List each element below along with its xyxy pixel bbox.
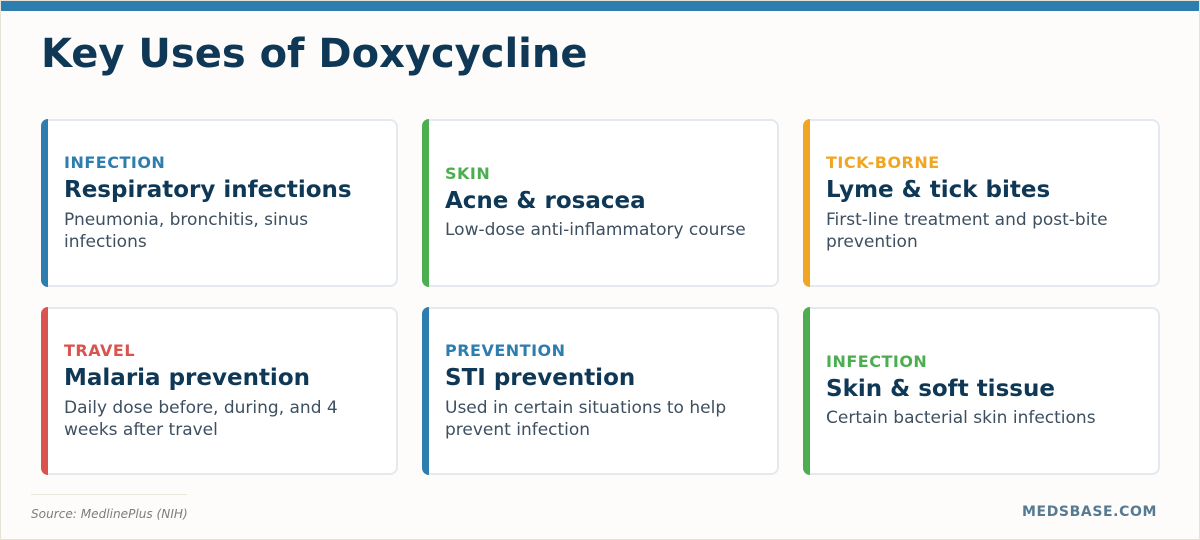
card description: First-line treatment and post-bite — [826, 210, 1108, 230]
card description: Daily dose before, during, and 4 — [64, 398, 338, 418]
panel: skin and soft tissue — [803, 307, 1160, 475]
accent bar: green — [422, 119, 429, 287]
card heading: Lyme & tick bites — [826, 177, 1050, 203]
card heading: Acne & rosacea — [445, 188, 646, 214]
card description — [64, 210, 308, 252]
panel: STI prevention — [422, 307, 779, 475]
card description: Certain bacterial skin infections — [826, 408, 1096, 428]
accent bar: green — [803, 307, 810, 475]
panel: acne and rosacea — [422, 119, 779, 287]
top accent bar — [1, 1, 1199, 11]
accent bar: blue — [422, 307, 429, 475]
card description — [64, 398, 338, 440]
brand mark: MEDSBASE.COM — [1022, 504, 1157, 520]
card heading: STI prevention — [445, 365, 635, 391]
card description — [445, 398, 726, 440]
category label: TRAVEL — [64, 341, 135, 360]
card description: weeks after travel — [64, 420, 218, 440]
card heading: Malaria prevention — [64, 365, 310, 391]
category label: INFECTION — [64, 153, 165, 172]
card description: Pneumonia, bronchitis, sinus — [64, 210, 308, 230]
title: Key Uses of Doxycycline — [41, 31, 587, 77]
card description: prevent infection — [445, 420, 590, 440]
card description: prevention — [826, 232, 918, 252]
source rule — [31, 494, 187, 495]
category label: PREVENTION — [445, 341, 566, 360]
accent bar: red — [41, 307, 48, 475]
category label: INFECTION — [826, 352, 927, 371]
card heading: Skin & soft tissue — [826, 376, 1055, 402]
panel: malaria prevention — [41, 307, 398, 475]
card description: infections — [64, 232, 147, 252]
panel: lyme and tick bites — [803, 119, 1160, 287]
card description: Used in certain situations to help — [445, 398, 726, 418]
card heading: Respiratory infections — [64, 177, 352, 203]
accent bar: blue — [41, 119, 48, 287]
source note: Source: MedlinePlus (NIH) — [31, 507, 188, 521]
card description — [826, 210, 1108, 252]
accent bar: amber — [803, 119, 810, 287]
category label: TICK-BORNE — [826, 153, 940, 172]
category label: SKIN — [445, 164, 490, 183]
card description: Low-dose anti-inflammatory course — [445, 220, 746, 240]
panel: respiratory infections — [41, 119, 398, 287]
